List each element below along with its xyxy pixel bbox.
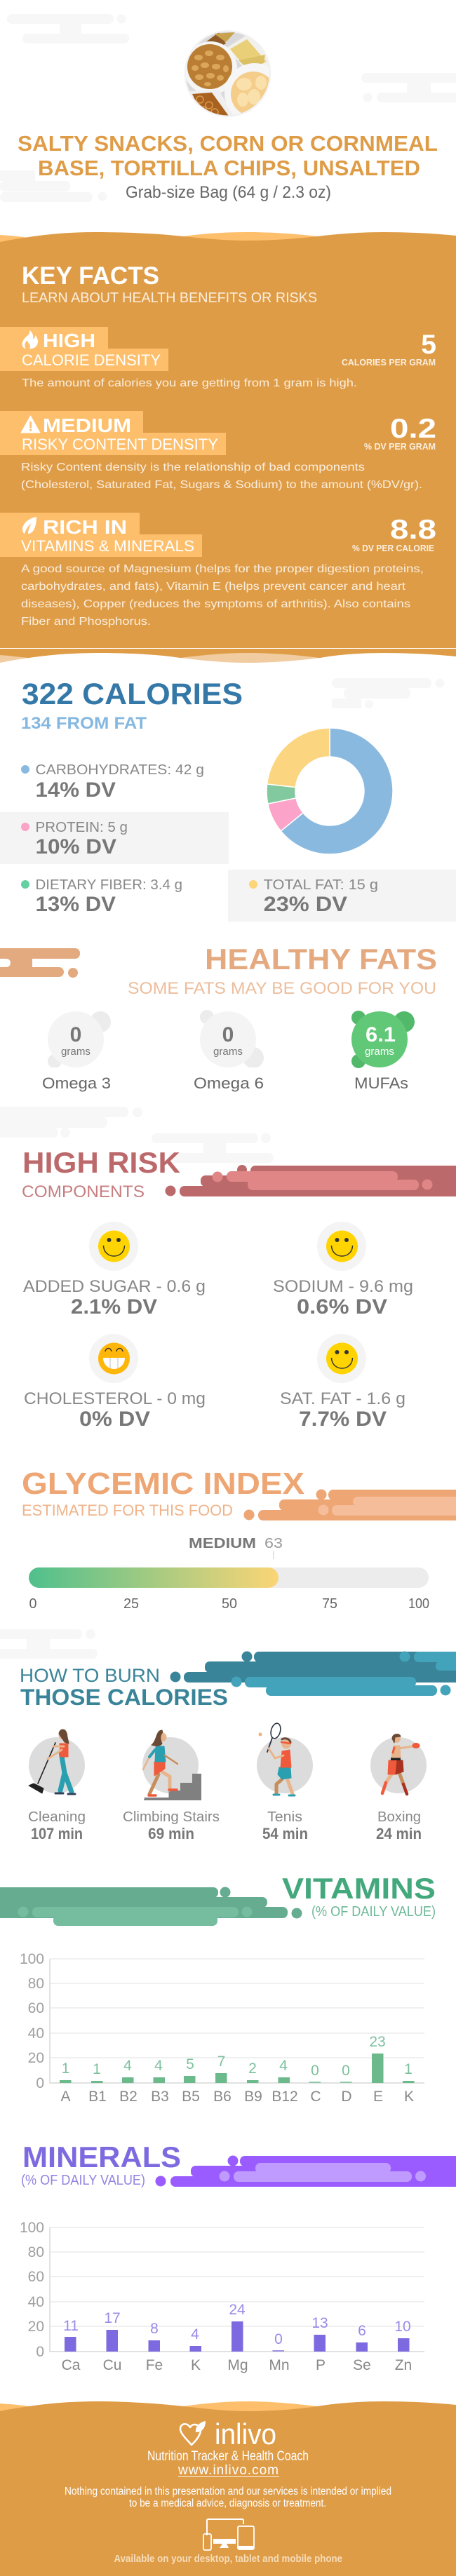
bar chart: vitamins: 100: [20, 1951, 44, 1967]
calories heading: 322 CALORIES: [22, 677, 243, 711]
bar chart: vitamins: 1: [93, 2061, 101, 2077]
bar chart: vitamins: 4: [123, 2058, 132, 2074]
sodium: [273, 1222, 413, 1319]
activity: boxing: 24 min: [376, 1825, 422, 1842]
bar chart: vitamins: 7: [217, 2054, 225, 2070]
omega 3: 0: [70, 1023, 81, 1046]
high calorie density: CALORIE DENSITY: [22, 351, 161, 369]
bar chart: vitamins: C: [310, 2089, 321, 2105]
bar chart: vitamins: 4: [154, 2058, 163, 2074]
availability note: Available on your desktop, tablet and mobile phone: [114, 2553, 342, 2565]
banner: vitamins: [0, 1887, 302, 1926]
bottom wave: [0, 649, 456, 663]
bar chart: vitamins: B3: [151, 2089, 169, 2105]
glycemic scale: [29, 1596, 429, 1612]
banner: high risk: [166, 1165, 456, 1196]
bar chart: vitamins: [20, 1951, 424, 2105]
saturated fat: SAT. FAT - 1.6 g: [280, 1389, 405, 1408]
cholesterol: 0% DV: [79, 1408, 150, 1431]
bar chart: minerals: Se: [353, 2357, 371, 2373]
bar chart: vitamins: B12: [271, 2089, 298, 2105]
activity: boxing: Boxing: [377, 1809, 421, 1825]
high calorie density: [0, 327, 436, 389]
burn heading: [20, 1665, 228, 1710]
burn heading: THOSE CALORIES: [20, 1685, 228, 1710]
bar chart: minerals: Fe: [146, 2357, 163, 2373]
icon: person climbing stairs: [143, 1730, 201, 1800]
minerals heading: (% OF DAILY VALUE): [21, 2173, 145, 2188]
panel: minerals: [20, 2140, 456, 2373]
panel: high risk: [22, 1146, 456, 1431]
bar chart: minerals: Mg: [227, 2357, 248, 2373]
omega 3: grams: [61, 1046, 90, 1058]
bar chart: vitamins: A: [60, 2089, 71, 2105]
bar chart: minerals: 17: [104, 2310, 121, 2326]
high risk heading: HIGH RISK: [22, 1146, 180, 1179]
medium risky content density: 0.2: [390, 414, 436, 444]
glycemic value: 63: [264, 1536, 283, 1551]
activity: cleaning: 107 min: [31, 1825, 83, 1842]
glycemic heading: GLYCEMIC INDEX: [22, 1466, 304, 1501]
bar chart: vitamins: 1: [62, 2061, 69, 2077]
legend: dietary fiber: DIETARY FIBER: 3.4 g: [35, 877, 182, 893]
legend: total fat: [228, 870, 456, 922]
bar chart: minerals: 6: [358, 2323, 366, 2339]
key facts heading: [22, 262, 317, 306]
high calorie density: CALORIES PER GRAM: [342, 357, 436, 367]
bar chart: vitamins: 20: [28, 2050, 44, 2066]
mufas: [351, 1011, 415, 1092]
rich in vitamins and minerals: carbohydrates, and fats), Vitamin E (helps prevent cancer and heart: [21, 581, 406, 593]
minerals heading: MINERALS: [22, 2140, 181, 2173]
omega 6: grams: [213, 1046, 243, 1058]
bar chart: minerals: 8: [150, 2321, 159, 2337]
bar chart: minerals: Zn: [395, 2357, 412, 2373]
icon: heart with leaf: [180, 2421, 206, 2445]
omega 6: 0: [222, 1023, 234, 1046]
mufas: 6.1: [366, 1023, 396, 1046]
vitamins heading: (% OF DAILY VALUE): [311, 1904, 436, 1920]
legend: total fat: TOTAL FAT: 15 g: [264, 877, 378, 893]
medium risky content density: [0, 411, 436, 491]
activity: tennis: [257, 1722, 313, 1842]
panel: calories: [0, 677, 456, 922]
bar chart: minerals: 60: [28, 2269, 44, 2285]
bar chart: vitamins: B5: [182, 2089, 200, 2105]
bar chart: minerals: [20, 2220, 424, 2373]
bar chart: minerals: P: [316, 2357, 326, 2373]
key facts heading: LEARN ABOUT HEALTH BENEFITS OR RISKS: [22, 290, 317, 306]
food photo: [184, 30, 271, 117]
footer wave: [0, 2401, 456, 2576]
panel: healthy fats: [0, 943, 437, 1092]
healthy fats heading: SOME FATS MAY BE GOOD FOR YOU: [128, 979, 436, 998]
rich in vitamins and minerals: A good source of Magnesium (helps for the proper digestion proteins,: [21, 563, 424, 575]
calories heading: [21, 677, 243, 733]
added sugar: ADDED SUGAR - 0.6 g: [23, 1277, 206, 1296]
bar chart: minerals: Cu: [103, 2357, 121, 2373]
icon: flame: [22, 330, 38, 349]
high calorie density: HIGH: [43, 330, 95, 351]
legend: total fat: 23% DV: [264, 893, 347, 916]
bar chart: minerals: 0: [36, 2344, 44, 2360]
logo: [180, 2417, 276, 2450]
website link: www.inlivo.com: [177, 2463, 279, 2478]
panel: burn calories: [20, 1651, 456, 1842]
bar chart: vitamins: 0: [36, 2075, 44, 2091]
rich in vitamins and minerals: diseases), Copper (reduces the symptoms of arthritis). Also contains: [21, 598, 410, 610]
bar chart: vitamins: 4: [279, 2058, 288, 2074]
activity: cleaning: Cleaning: [28, 1809, 86, 1825]
glycemic heading: ESTIMATED FOR THIS FOOD: [22, 1502, 233, 1519]
rich in vitamins and minerals: RICH IN: [43, 516, 127, 538]
panel: vitamins: [0, 1872, 436, 2105]
healthy fats heading: HEALTHY FATS: [205, 943, 437, 976]
glycemic scale: 100: [408, 1596, 429, 1612]
medium risky content density: Risky Content density is the relationship of bad components: [21, 461, 365, 473]
key facts heading: KEY FACTS: [22, 262, 159, 290]
bar chart: minerals: 100: [20, 2220, 44, 2236]
disclaimer: to be a medical advice, diagnosis or treatment.: [129, 2497, 326, 2509]
icon: warning triangle: [21, 416, 40, 433]
bar chart: vitamins: E: [373, 2089, 383, 2105]
glycemic scale: 50: [222, 1596, 237, 1612]
icon: smiley: [98, 1230, 130, 1262]
medium risky content density: % DV PER GRAM: [364, 441, 436, 452]
bar chart: vitamins: B1: [88, 2089, 107, 2105]
calories heading: 134 FROM FAT: [21, 714, 147, 733]
disclaimer: [65, 2486, 391, 2509]
saturated fat: 7.7% DV: [299, 1408, 387, 1431]
legend: carbohydrates: CARBOHYDRATES: 42 g: [35, 762, 204, 778]
bar chart: minerals: Mn: [269, 2357, 290, 2373]
activity: climbing stairs: [123, 1730, 220, 1842]
saturated fat: [280, 1334, 405, 1431]
bar chart: vitamins: 60: [28, 2000, 44, 2016]
healthy fats heading: [128, 943, 437, 998]
omega 6: [194, 1010, 264, 1092]
bar chart: minerals: 13: [311, 2315, 328, 2331]
bar chart: vitamins: 0: [311, 2063, 319, 2079]
icon: devices: [203, 2519, 254, 2550]
legend: protein: [0, 812, 229, 864]
high risk heading: [22, 1146, 180, 1201]
bar chart: minerals: 40: [28, 2294, 44, 2310]
bar chart: vitamins: 2: [248, 2061, 257, 2077]
glycemic value: [189, 1536, 283, 1559]
bar chart: vitamins: 5: [186, 2056, 194, 2072]
bar chart: minerals: Ca: [62, 2357, 81, 2373]
rich in vitamins and minerals: VITAMINS & MINERALS: [21, 537, 194, 555]
icon: boxer: [382, 1734, 420, 1794]
legend: carbohydrates: [21, 762, 204, 802]
banner: healthy fats: [0, 948, 80, 978]
logo: inlivo: [215, 2417, 276, 2450]
legend: dietary fiber: 13% DV: [35, 893, 116, 916]
panel: key facts: [0, 232, 456, 663]
bar chart: minerals: K: [191, 2357, 201, 2373]
bar chart: vitamins: 40: [28, 2025, 44, 2042]
sodium: SODIUM - 9.6 mg: [273, 1277, 413, 1296]
donut chart: [267, 728, 393, 854]
cholesterol: CHOLESTEROL - 0 mg: [24, 1389, 206, 1408]
activity: cleaning: [28, 1729, 86, 1842]
bar chart: vitamins: B9: [244, 2089, 262, 2105]
icon: grinning face: [98, 1342, 130, 1375]
icon: person sweeping: [29, 1729, 75, 1794]
disclaimer: Nothing contained in this presentation and our services is intended or implied: [65, 2486, 391, 2497]
burn heading: HOW TO BURN: [20, 1665, 160, 1686]
activity: climbing stairs: 69 min: [148, 1825, 194, 1842]
bar chart: vitamins: 23: [369, 2034, 386, 2050]
bar chart: vitamins: 0: [342, 2063, 350, 2079]
title: SALTY SNACKS, CORN OR CORNMEAL: [18, 132, 438, 156]
bar chart: vitamins: D: [341, 2089, 352, 2105]
added sugar: 2.1% DV: [71, 1295, 157, 1319]
legend: dietary fiber: [21, 877, 182, 916]
omega 3: Omega 3: [42, 1074, 111, 1092]
glycemic bar: [29, 1567, 429, 1588]
cholesterol: [24, 1334, 206, 1431]
bar chart: minerals: 20: [28, 2319, 44, 2335]
activity: tennis: 54 min: [262, 1825, 308, 1842]
top wave: [0, 232, 456, 245]
icon: tennis player: [258, 1722, 295, 1795]
activity: boxing: [370, 1734, 427, 1842]
bar chart: minerals: 24: [229, 2302, 246, 2318]
banner: minerals: [156, 2156, 456, 2187]
tagline: Nutrition Tracker & Health Coach: [147, 2449, 309, 2464]
minerals heading: [21, 2140, 181, 2188]
icon: smiley: [326, 1230, 358, 1262]
banner: glycemic: [244, 1490, 456, 1520]
bar chart: vitamins: 80: [28, 1976, 44, 1992]
icon: leaf: [22, 517, 36, 534]
medium risky content density: RISKY CONTENT DENSITY: [22, 436, 218, 453]
rich in vitamins and minerals: % DV PER CALORIE: [352, 543, 434, 553]
sodium: 0.6% DV: [297, 1295, 387, 1319]
rich in vitamins and minerals: [0, 513, 436, 628]
glycemic scale: 0: [29, 1596, 36, 1612]
medium risky content density: (Cholesterol, Saturated Fat, Sugars & Sodium) to the amount (%DV/gr).: [21, 479, 422, 491]
legend: protein: PROTEIN: 5 g: [35, 820, 128, 835]
added sugar: [23, 1222, 206, 1319]
legend: carbohydrates: 14% DV: [35, 778, 116, 802]
title: [18, 132, 438, 180]
vitamins heading: [282, 1872, 436, 1920]
bar chart: vitamins: B6: [213, 2089, 232, 2105]
bar chart: vitamins: B2: [119, 2089, 138, 2105]
rich in vitamins and minerals: 8.8: [390, 515, 436, 545]
activity: climbing stairs: Climbing Stairs: [123, 1809, 220, 1825]
glycemic heading: [22, 1466, 304, 1519]
bar chart: minerals: 0: [274, 2331, 283, 2347]
serving size subtitle: Grab-size Bag (64 g / 2.3 oz): [126, 183, 331, 202]
icon: smiley: [326, 1342, 358, 1375]
bar chart: vitamins: K: [404, 2089, 414, 2105]
mufas: grams: [365, 1046, 394, 1058]
medium risky content density: MEDIUM: [43, 414, 131, 436]
rich in vitamins and minerals: Fiber and Phosphorus.: [21, 616, 151, 628]
panel: glycemic index: [22, 1466, 456, 1612]
panel: footer: [0, 2401, 456, 2576]
glycemic scale: 25: [123, 1596, 139, 1612]
high calorie density: 5: [421, 330, 436, 360]
high risk heading: COMPONENTS: [22, 1182, 145, 1201]
bar chart: minerals: 10: [394, 2319, 411, 2335]
bar chart: vitamins: 1: [404, 2061, 413, 2077]
omega 3: [42, 1011, 111, 1092]
glycemic scale: 75: [322, 1596, 337, 1612]
glycemic value: MEDIUM: [189, 1536, 256, 1551]
high calorie density: The amount of calories you are getting from 1 gram is high.: [22, 377, 357, 389]
activity: tennis: Tenis: [267, 1809, 302, 1825]
bar chart: minerals: 4: [191, 2326, 199, 2342]
omega 6: Omega 6: [194, 1074, 264, 1092]
title: BASE, TORTILLA CHIPS, UNSALTED: [38, 156, 420, 180]
bar chart: minerals: 11: [63, 2318, 79, 2334]
bar chart: minerals: 80: [28, 2244, 44, 2260]
vitamins heading: VITAMINS: [282, 1872, 436, 1905]
mufas: MUFAs: [354, 1074, 408, 1092]
legend: protein: 10% DV: [35, 835, 116, 858]
banner: burn: [170, 1651, 456, 1696]
